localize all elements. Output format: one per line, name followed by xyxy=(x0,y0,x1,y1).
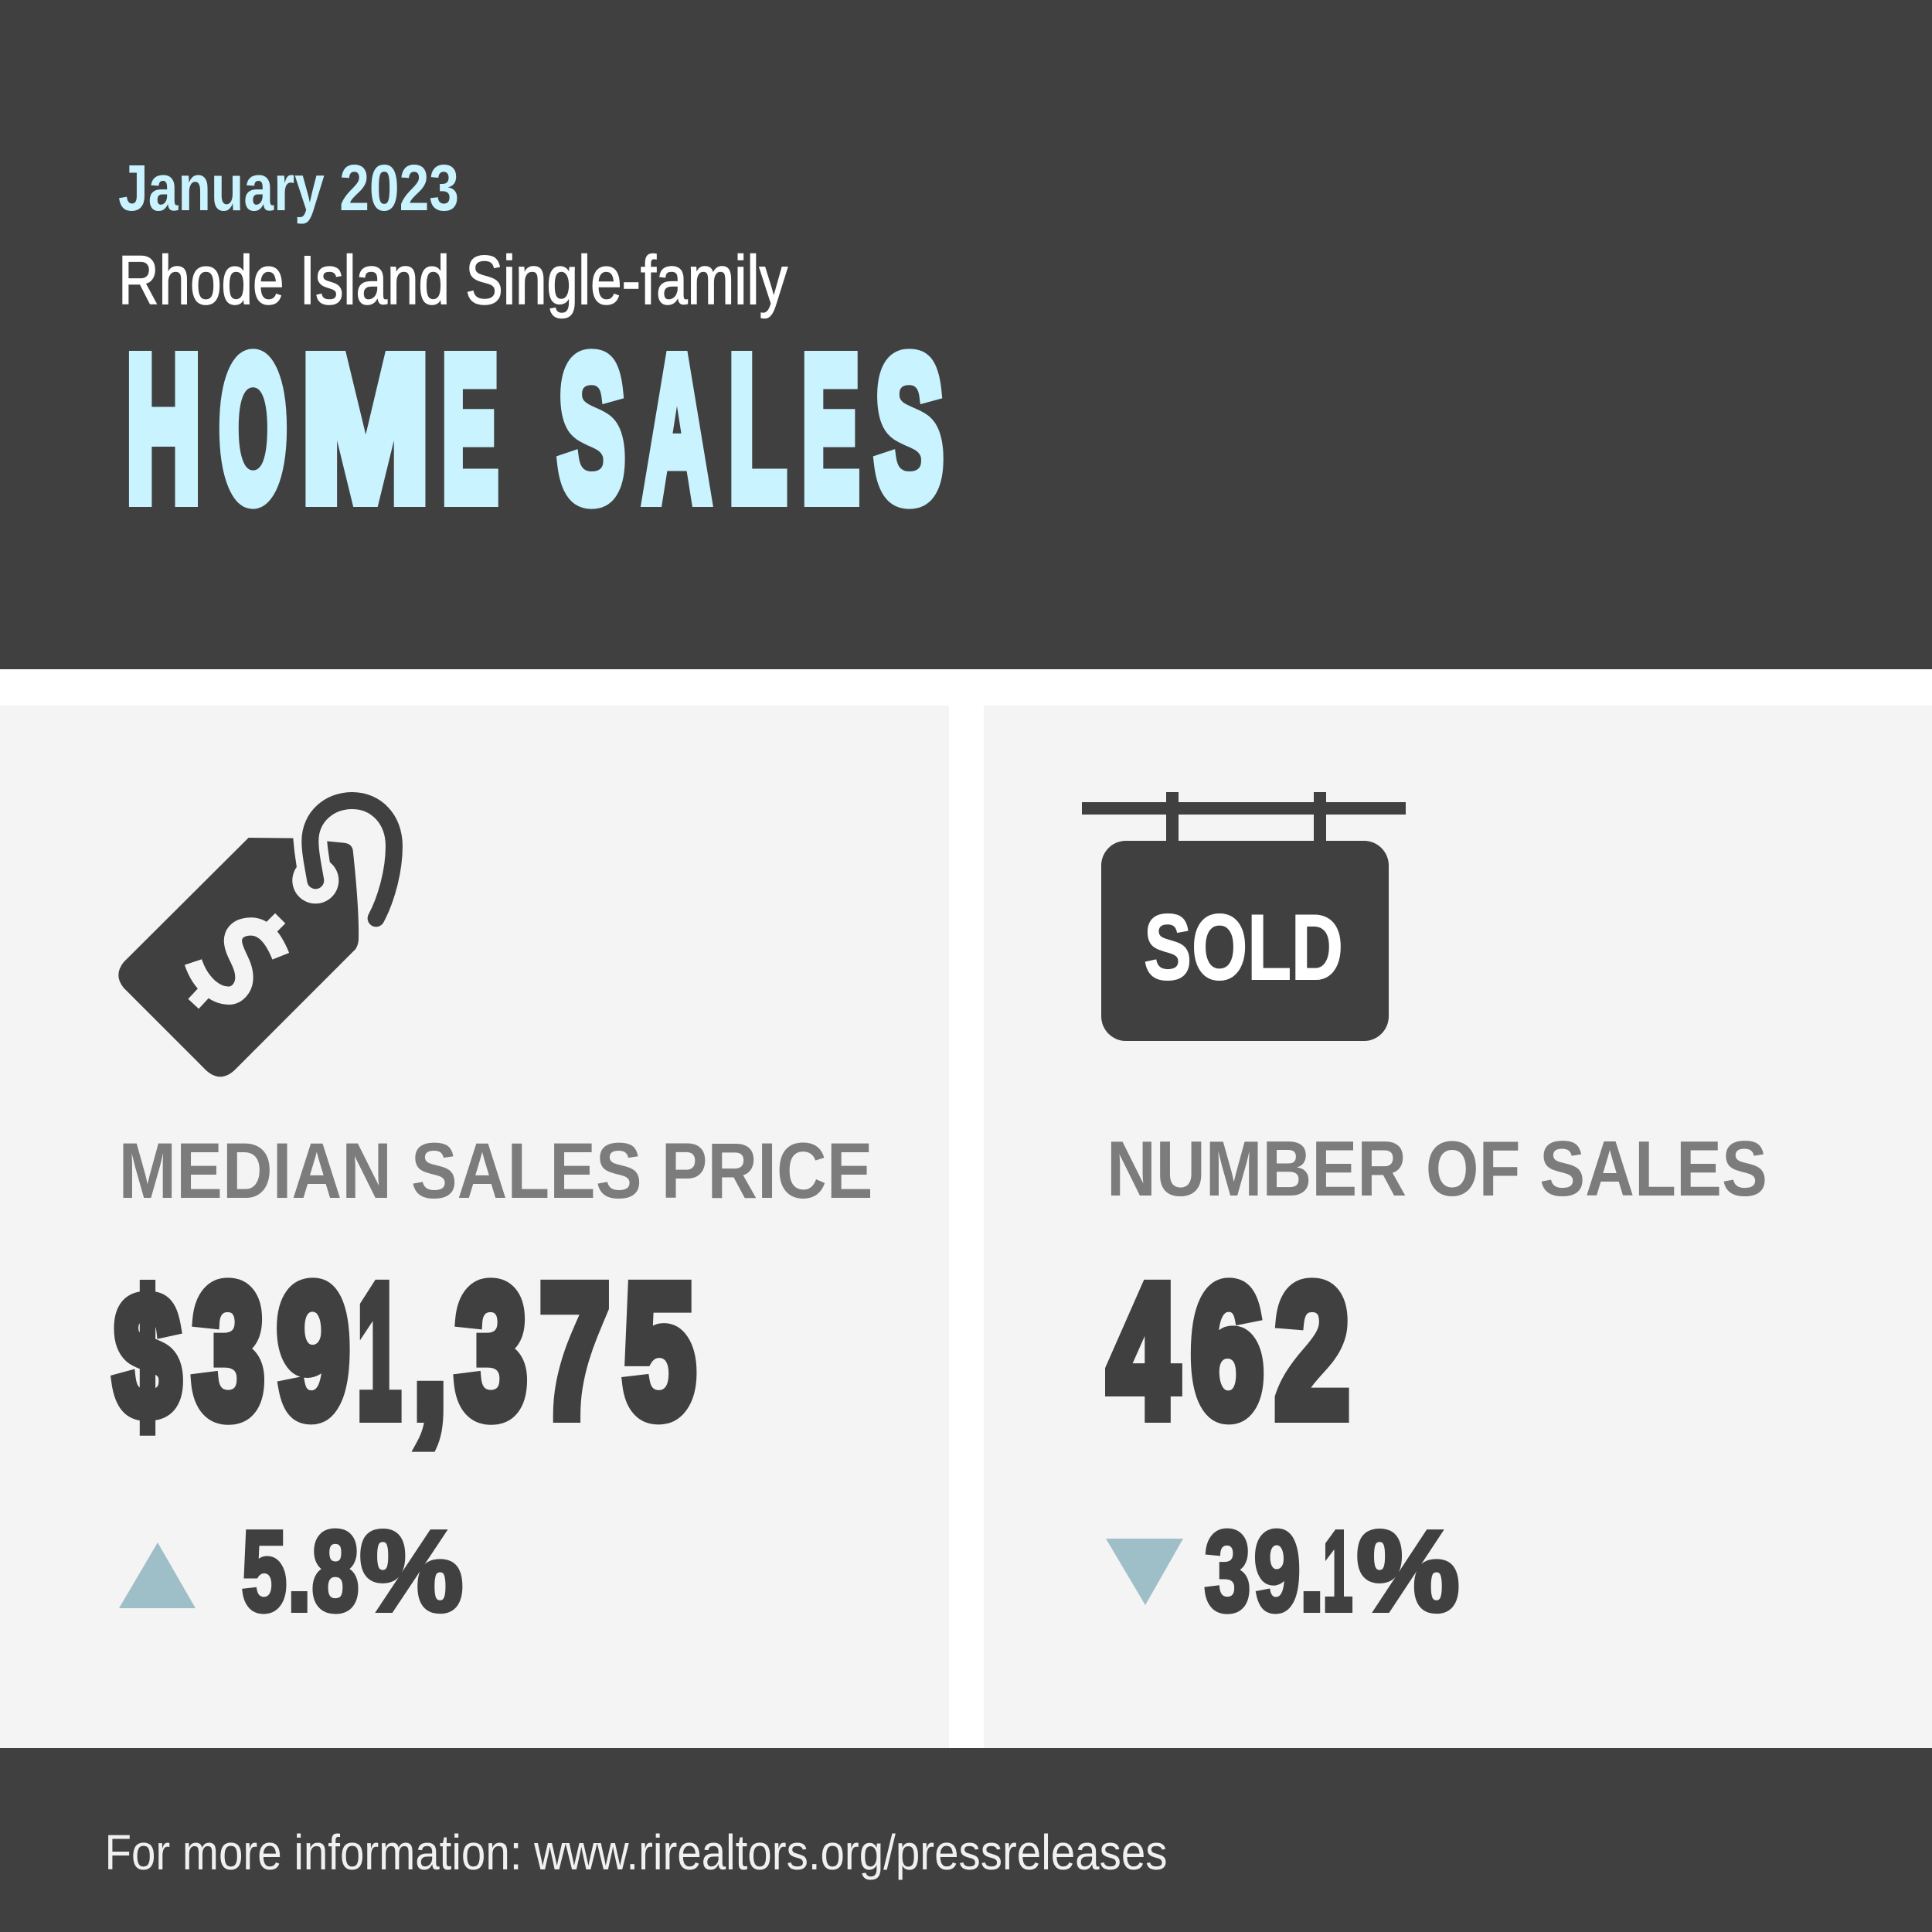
value: median sales price: 9 xyxy=(277,1247,350,1456)
value: median sales price: 5 xyxy=(623,1247,696,1456)
title: A xyxy=(643,315,711,543)
icon: up triangle xyxy=(119,1543,196,1608)
icon: sold sign: SOLD xyxy=(1144,896,1343,999)
label: median sales price: MEDIAN SALES PRICE xyxy=(119,1127,873,1215)
value: number of sales: 6 xyxy=(1191,1247,1264,1456)
value: price change: % xyxy=(360,1508,463,1635)
value: price change: 8 xyxy=(311,1508,359,1635)
value: sales change: . xyxy=(1299,1508,1325,1635)
value: price change: 5 xyxy=(241,1508,287,1635)
value: number of sales: 2 xyxy=(1275,1247,1349,1456)
title: L xyxy=(729,315,787,543)
value: median sales price: $ xyxy=(114,1258,180,1453)
panel: median sales price xyxy=(0,706,949,1748)
subtitle: Rhode Island Single-family xyxy=(118,241,787,318)
title: S xyxy=(558,315,625,543)
value: median sales price: 7 xyxy=(539,1247,610,1456)
icon: sold sign xyxy=(1082,792,1406,1041)
value: median sales price: , xyxy=(413,1247,447,1456)
panel: header xyxy=(0,0,1932,669)
date heading: January 2023 xyxy=(118,151,459,224)
panel: number of sales xyxy=(984,706,1932,1748)
value: sales change: 1 xyxy=(1323,1508,1353,1635)
footer text: For more information: www.rirealtors.org/pressreleases xyxy=(105,1825,1167,1880)
label: number of sales: NUMBER OF SALES xyxy=(1107,1126,1767,1213)
title: S xyxy=(875,315,944,543)
value: median sales price: 1 xyxy=(358,1247,401,1456)
panel: footer xyxy=(0,1748,1932,1932)
icon: down triangle xyxy=(1106,1539,1183,1605)
value: sales change: 9 xyxy=(1253,1508,1301,1635)
icon: price tag xyxy=(118,801,394,1077)
value: median sales price: 3 xyxy=(455,1247,527,1456)
title: O xyxy=(219,315,287,543)
value: median sales price: 3 xyxy=(192,1247,264,1456)
value: sales change: 3 xyxy=(1204,1508,1250,1635)
value: number of sales: 4 xyxy=(1108,1247,1179,1456)
value: price change: . xyxy=(287,1508,311,1635)
title: M xyxy=(301,315,430,543)
value: sales change: % xyxy=(1357,1508,1459,1635)
title: E xyxy=(442,315,498,543)
title: H xyxy=(126,315,201,543)
title: E xyxy=(802,315,859,543)
